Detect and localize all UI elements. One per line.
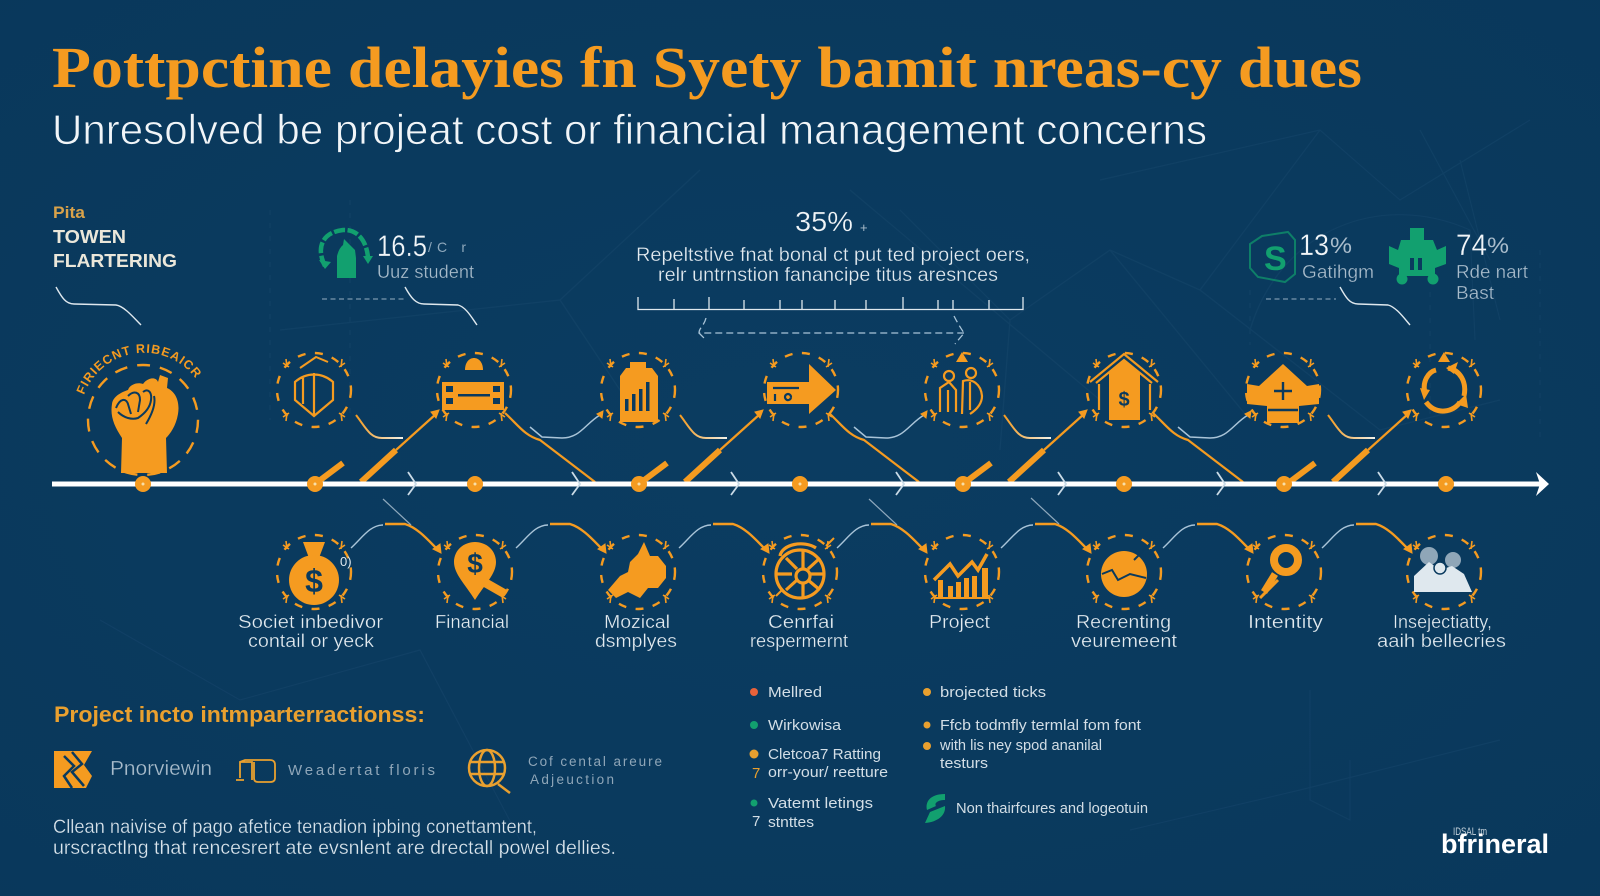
bullet list: right column: Ffcb todmfly termlal fom font <box>940 717 1142 734</box>
stat: 16.5: Uuz student <box>377 262 474 282</box>
bullet list: left column: stnttes <box>768 814 814 831</box>
icon: shield <box>277 353 351 427</box>
paragraph <box>53 817 616 859</box>
bullet list: right column <box>923 684 1148 823</box>
icon: arrow sign <box>764 353 838 427</box>
lower labels: contail or yeck <box>248 631 375 651</box>
top left label: Pita <box>53 203 86 222</box>
bullet list: left column: orr-your/ reetture <box>768 764 888 781</box>
bullet list: left column: 7 <box>752 765 760 782</box>
icon: money bag <box>277 535 352 609</box>
paragraph: urscractlng that rencesrert ate evsnlent are drectall powel dellies. <box>53 838 616 859</box>
stat: 13% and 74%: % <box>1330 233 1352 258</box>
lower labels: Societ inbedivor <box>238 612 383 632</box>
lower labels: Cenrfai <box>768 612 834 632</box>
lower labels: Mozical <box>604 612 670 632</box>
icon: magnifier key <box>1247 535 1321 609</box>
legend row <box>54 750 662 793</box>
top left label <box>53 203 177 325</box>
icon: two people <box>925 352 999 427</box>
stat: 35% with ruler <box>636 206 1030 344</box>
stat: 35% with ruler: + <box>860 220 868 235</box>
bullet list: left column: Cletcoa7 Ratting <box>768 746 881 763</box>
icon: green S badge: S <box>1264 240 1287 278</box>
icon: group of people <box>1407 535 1481 609</box>
stat: 13% and 74%: % <box>1487 233 1509 258</box>
icon: recycle arrows <box>1407 352 1481 427</box>
lower labels <box>238 612 1506 651</box>
stat: 13% and 74%: 13 <box>1299 229 1329 262</box>
icon: spiral gear shell <box>763 535 837 609</box>
icon: medical house <box>1246 353 1320 427</box>
top left label: FLARTERING <box>53 250 177 271</box>
background network pattern <box>100 120 1540 840</box>
lower labels: veuremeent <box>1071 631 1177 651</box>
lower labels: Project <box>929 612 990 632</box>
icon: dollar pin with magnifier <box>438 535 512 609</box>
stat: 13% and 74%: Gatihgm <box>1302 262 1374 282</box>
stat: 35% with ruler: Repeltstive fnat bonal ct put ted project oers, <box>636 245 1030 266</box>
bullet list: left column: Vatemt letings <box>768 795 873 812</box>
icon: money bag: $ <box>305 563 323 599</box>
lower labels: respermernt <box>750 631 848 651</box>
stat: 13% and 74% <box>1250 228 1528 325</box>
paragraph: Cllean naivise of pago afetice tenadion ipbing conettamtent, <box>53 817 537 838</box>
stat: 35% with ruler: 35% <box>795 206 853 237</box>
icon: growth chart <box>925 535 999 609</box>
top left label: TOWEN <box>53 226 126 247</box>
bullet list: left column: 7 <box>752 813 760 830</box>
bullet list: right column: Non thairfcures and logeotuin <box>956 801 1148 817</box>
icon: green S badge <box>1250 232 1295 282</box>
icon: devices outline <box>236 760 275 782</box>
lower labels: Insejectiatty, <box>1393 612 1492 632</box>
stat: 13% and 74%: 74 <box>1456 229 1487 262</box>
stat: 16.5 <box>319 230 477 325</box>
legend row: Adjeuction <box>530 772 614 787</box>
bullet list: right column: with lis ney spod ananilal <box>939 737 1102 754</box>
icon: raised fist with arched label: FIRIECNT RIBEAICR <box>76 344 201 394</box>
bullet list: right column: testurs <box>940 755 988 772</box>
bullet list: left column <box>750 684 888 831</box>
stat: 13% and 74%: Rde nart <box>1456 262 1528 282</box>
subtitle: Unresolved be projeat cost or financial management concerns <box>52 106 1207 153</box>
icon: globe magnifier <box>469 750 510 793</box>
stat: 13% and 74%: Bast <box>1456 283 1494 303</box>
icon: green swoosh <box>925 794 945 823</box>
lower connectors <box>351 498 1412 553</box>
timeline axis <box>52 472 1549 496</box>
dashed arrow <box>699 316 964 344</box>
icon: green hand cycle <box>319 230 373 278</box>
lower labels: aaih bellecries <box>1377 631 1506 651</box>
ruler <box>638 297 1023 310</box>
icon: house with dollar: $ <box>1118 389 1130 411</box>
stat: 16.5: /C r <box>428 239 466 255</box>
icon: green robot <box>1389 228 1446 284</box>
lower labels: Intentity <box>1248 612 1323 632</box>
bullet list: right column: brojected ticks <box>940 684 1046 701</box>
section heading: Project incto intmparterractionss: <box>54 702 425 727</box>
upper connectors <box>315 410 1411 484</box>
title: Pottpctine delayies fn Syety bamit nreas-cy dues <box>52 35 1362 100</box>
icon: toolbox <box>437 353 511 427</box>
legend row: Pnorviewin <box>110 758 212 780</box>
stat: 35% with ruler: relr untrnstion fanancipe titus aresnces <box>658 265 998 286</box>
bullet list: left column: Wirkowisa <box>768 717 842 734</box>
icon: house with dollar <box>1087 353 1161 427</box>
icon: briefcase with bars <box>601 353 675 427</box>
logo: IDSAL tm <box>1453 826 1487 838</box>
icon: money bag: 0) <box>340 554 352 569</box>
icon: dollar pin with magnifier: $ <box>467 548 483 579</box>
icon: circle with zigzag <box>1087 535 1161 609</box>
lower labels: Recrenting <box>1076 612 1171 632</box>
logo: bfrineral <box>1441 829 1549 859</box>
lower labels: Financial <box>435 612 509 632</box>
icon: raised fist with arched label <box>76 344 201 476</box>
icon: chevron tile <box>54 751 92 788</box>
legend row: Cof cental areure <box>528 754 662 769</box>
icon: map blob <box>601 535 675 609</box>
legend row: Weadertat floris <box>288 762 435 779</box>
timeline nodes <box>135 476 1454 492</box>
lower labels: dsmplyes <box>595 631 677 651</box>
stat: 16.5: 16.5 <box>377 230 427 263</box>
bullet list: left column: Mellred <box>768 684 822 701</box>
